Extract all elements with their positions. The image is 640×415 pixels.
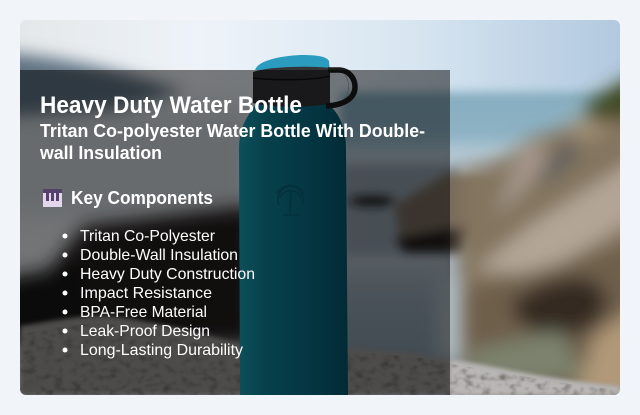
list of key components: Impact Resistance — [80, 285, 212, 302]
list of key components — [62, 228, 255, 359]
bottle body — [239, 104, 348, 395]
cap — [253, 67, 330, 107]
distant headland left — [0, 50, 185, 118]
dark rocks behind overlay — [0, 205, 255, 345]
blurred rocks right of bottle — [348, 172, 480, 252]
rocks far right — [440, 70, 640, 400]
icon: piano keys — [43, 189, 62, 207]
list of key components: Long-Lasting Durability — [80, 342, 243, 359]
subtitle: wall Insulation — [39, 143, 162, 163]
bottle — [239, 55, 355, 395]
list of key components: Heavy Duty Construction — [80, 266, 255, 283]
left mid ground — [20, 106, 245, 210]
sea — [340, 92, 640, 370]
section heading: key components: Key Components — [71, 188, 213, 208]
dark overlay panel — [20, 70, 450, 395]
cap handle — [326, 70, 355, 106]
subtitle — [39, 121, 425, 163]
palm logo — [277, 186, 304, 215]
subtitle: Tritan Co-polyester Water Bottle With Double- — [40, 121, 425, 141]
list of key components: BPA-Free Material — [80, 304, 207, 321]
list of key components: Leak-Proof Design — [80, 323, 210, 340]
list of key components: Double-Wall Insulation — [80, 247, 238, 264]
list of key components: Tritan Co-Polyester — [80, 228, 216, 245]
blue lid top — [255, 55, 330, 72]
title: Heavy Duty Water Bottle — [40, 92, 302, 119]
foreground rocks — [20, 316, 620, 395]
